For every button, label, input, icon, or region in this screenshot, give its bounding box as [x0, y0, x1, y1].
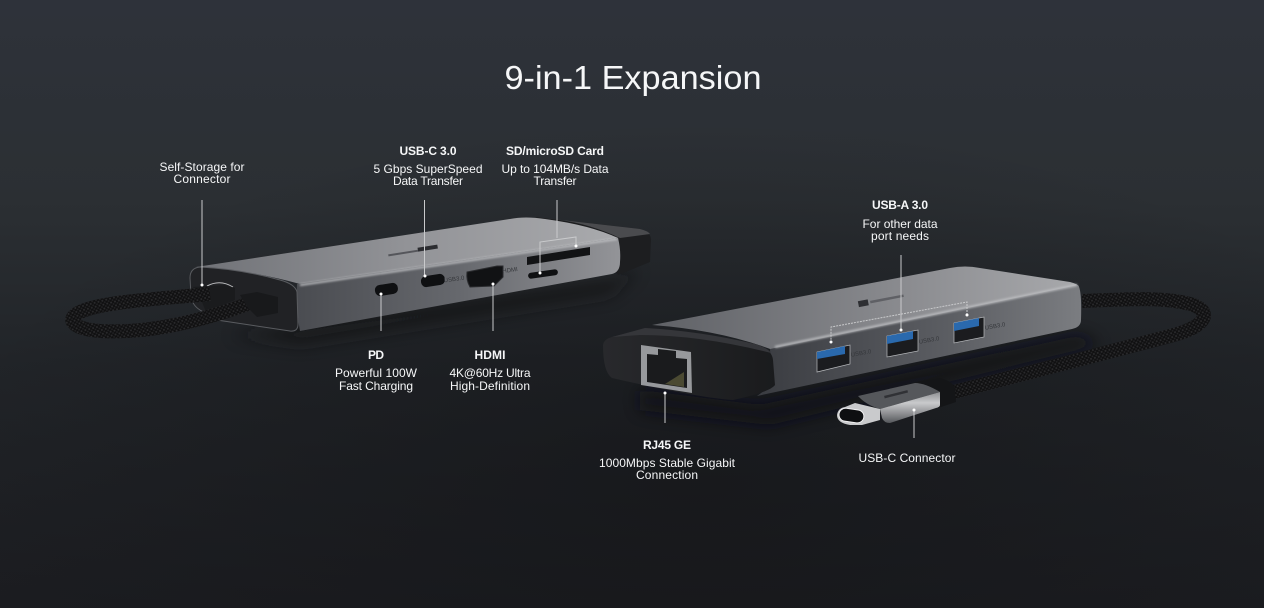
- shadow under left hub: [230, 270, 640, 345]
- label: SD/microSD: SD/microSD Card: [506, 144, 604, 158]
- black end cap: [603, 328, 775, 400]
- HDMI port: [467, 266, 503, 287]
- USB3.0 marks: USB3.0: [850, 349, 873, 359]
- front face: [757, 285, 1081, 396]
- USB-A port 2: [887, 330, 918, 357]
- black collar: [918, 378, 956, 408]
- title: 9-in-1 Expansion: [504, 59, 762, 96]
- front face: [297, 238, 620, 331]
- leader dots: [200, 244, 968, 412]
- USB3.0 marks: USB3.0: [984, 322, 1007, 332]
- logo on top: [858, 292, 904, 307]
- label: RJ45 GE: Connection: [636, 468, 698, 482]
- label: USB-A 3.0: port needs: [871, 229, 929, 243]
- label: HDMI: HDMI: [474, 348, 506, 362]
- USB3.0 marks: [850, 322, 1007, 359]
- cap top band: [612, 328, 771, 353]
- USB-C port: [420, 273, 446, 288]
- storage opening arc: [207, 283, 233, 287]
- metal front face: [880, 392, 940, 423]
- stored connector: [193, 285, 235, 312]
- RJ45 port: [641, 345, 692, 393]
- label: HDMI: High-Definition: [450, 379, 530, 393]
- USB-C cable and connector: [837, 299, 1204, 425]
- label: self-storage: Self-Storage for: [160, 160, 244, 174]
- microSD slot: [528, 269, 558, 279]
- label: PD: Fast Charging: [339, 379, 413, 393]
- USB3.0 mark: USB3.0: [443, 275, 465, 284]
- metal top plate: [858, 383, 940, 409]
- stored cable plug: [240, 292, 278, 317]
- label: USB-C connector: USB-C Connector: [858, 451, 956, 465]
- label: USB-C 3.0: USB-C 3.0: [400, 144, 457, 158]
- label: self-storage: Connector: [174, 172, 230, 186]
- label: RJ45 GE: RJ45 GE: [643, 438, 691, 452]
- highlight along top edge: [300, 239, 617, 285]
- logo mark: [388, 245, 438, 256]
- label: HDMI: [450, 348, 531, 393]
- label: self-storage: [160, 160, 244, 186]
- HDMI mark: HDMI: [502, 267, 518, 275]
- label: USB-A 3.0: For other data: [862, 217, 938, 231]
- right hub: USB-A side view: [603, 266, 1100, 425]
- braided cable: [950, 299, 1204, 393]
- shadow under right hub: [640, 335, 1100, 425]
- label: RJ45 GE: [599, 438, 736, 482]
- USB-C tip: [837, 403, 880, 425]
- USB-A port 1: [817, 345, 850, 372]
- highlight edge: [775, 285, 1077, 347]
- label: PD: PD: [368, 348, 384, 362]
- label: USB-A 3.0: [862, 198, 938, 243]
- label: PD: [335, 348, 418, 393]
- leader lines: [202, 200, 967, 438]
- label: RJ45 GE: 1000Mbps Stable Gigabit: [599, 456, 736, 470]
- black end cap: [535, 217, 651, 275]
- label: PD: Powerful 100W: [335, 366, 418, 380]
- left hub: ports side view with stored cable: [72, 217, 651, 345]
- top surface: [196, 218, 618, 284]
- USB-A port 3: [954, 317, 984, 343]
- label: SD/microSD: Up to 104MB/s Data: [502, 162, 609, 176]
- stored cable loop: [72, 294, 250, 331]
- recessed storage end: [190, 267, 298, 331]
- label: USB-C 3.0: 5 Gbps SuperSpeed: [374, 162, 482, 176]
- SD slot: [527, 247, 590, 265]
- label: USB-C 3.0: [374, 144, 482, 188]
- label: SD/microSD: [502, 144, 609, 188]
- PD port: [374, 282, 399, 297]
- top surface: [652, 266, 1079, 350]
- USB3.0 marks: USB3.0: [918, 336, 941, 346]
- label: USB-A 3.0: USB-A 3.0: [872, 198, 928, 212]
- label: HDMI: 4K@60Hz Ultra: [450, 366, 531, 380]
- tip opening: [838, 407, 865, 424]
- label: SD/microSD: Transfer: [534, 174, 576, 188]
- logo: [884, 390, 908, 398]
- label: USB-C 3.0: Data Transfer: [393, 174, 463, 188]
